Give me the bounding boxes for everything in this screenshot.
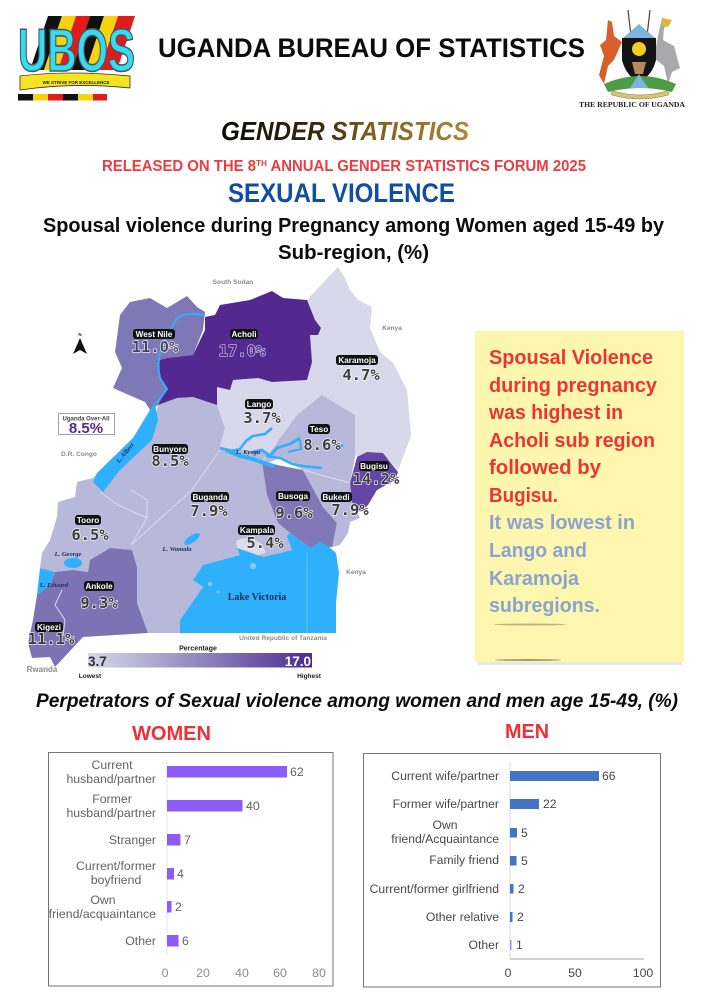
bar chart: men perpetrators: 22 xyxy=(543,797,557,811)
region label: Bukedi: 7.9% xyxy=(331,501,369,519)
bar chart: men perpetrators: friend/Acquaintance xyxy=(391,832,499,846)
callout: Uganda overall xyxy=(58,414,114,437)
region label: Buganda: Buganda xyxy=(192,493,228,502)
text: lowest finding: It was lowest in xyxy=(489,512,635,534)
map legend xyxy=(79,646,322,680)
bar chart: women perpetrators: Current/former xyxy=(76,859,156,873)
bar chart: men perpetrators: 66 xyxy=(602,769,616,783)
bar chart: men perpetrators: 50 xyxy=(568,966,582,980)
map legend: 3.7 xyxy=(88,654,107,669)
bar chart: women perpetrators: 2 xyxy=(175,900,182,914)
lake labels: L. Edward xyxy=(39,582,69,589)
bar chart: women perpetrators: 20 xyxy=(196,966,210,980)
bar chart: women perpetrators: friend/acquaintance xyxy=(49,907,156,921)
lake labels: Lake Victoria xyxy=(228,592,286,603)
neighbouring country labels: D.R. Congo xyxy=(61,451,97,458)
bar chart: women perpetrators: husband/partner xyxy=(66,772,156,786)
bar chart: men perpetrators: 1 xyxy=(516,938,523,952)
region label: Bugisu xyxy=(353,461,400,488)
region label: Buganda: 7.9% xyxy=(190,502,228,520)
bar chart: women perpetrators: 0 xyxy=(162,966,169,980)
lake: Albert and Nile xyxy=(93,314,205,492)
lake labels: L. Wamala xyxy=(161,546,192,553)
bar chart: women perpetrators: husband/partner xyxy=(66,806,156,820)
lake labels: L. Kyoga xyxy=(235,449,261,456)
heading: map title xyxy=(43,215,665,264)
region label: Busoga xyxy=(275,491,313,522)
region label: Acholi: 17.0% xyxy=(219,342,266,360)
lake labels: L. George xyxy=(54,551,81,558)
text: The Republic of Uganda: THE REPUBLIC OF UGANDA xyxy=(579,101,685,109)
bar chart: men perpetrators: Own xyxy=(432,818,458,832)
bar chart: men perpetrators: 2 xyxy=(518,882,525,896)
region label: Tooro xyxy=(71,515,109,544)
region label: Kampala xyxy=(238,525,284,552)
region: Acholi xyxy=(157,291,321,405)
logo: UBOS: WE STRIVE FOR EXCELLENCE xyxy=(42,80,110,85)
heading: map title: Sub-region, (%) xyxy=(278,242,429,264)
region borders xyxy=(55,442,350,636)
region label: Lango xyxy=(243,399,281,427)
region: Kampala xyxy=(236,538,266,558)
region: Karamoja and Lango xyxy=(217,267,411,470)
region label: Karamoja: 4.7% xyxy=(342,366,380,384)
text: lowest finding xyxy=(489,512,635,617)
lake: Edward xyxy=(37,568,55,595)
region label: Ankole xyxy=(80,581,118,612)
region label: Bukedi xyxy=(321,492,369,519)
heading: Men: MEN xyxy=(505,721,549,743)
region label: Teso: 8.6% xyxy=(303,436,341,454)
region label: West Nile: West Nile xyxy=(136,330,173,339)
heading: Women: WOMEN xyxy=(132,723,211,745)
region label: Kigezi: 11.1% xyxy=(28,630,75,648)
heading: perpetrators: Perpetrators of Sexual violence among women and men age 15-49, (%) xyxy=(36,691,678,712)
bar chart: women perpetrators: 40 xyxy=(246,799,260,813)
heading: Gender Statistics: GENDER STATISTICS xyxy=(221,118,469,146)
region label: Acholi: Acholi xyxy=(231,330,257,339)
region: Busoga xyxy=(262,462,337,548)
callout: Uganda overall: 8.5% xyxy=(69,420,103,437)
region: shore south of Lake Kyoga xyxy=(220,447,280,465)
region label: Teso: Teso xyxy=(310,425,328,434)
text: highest finding: Acholi sub region xyxy=(489,430,655,452)
bar chart: men perpetrators: Current/former girlfriend xyxy=(370,882,499,896)
bar chart: women perpetrators: Own xyxy=(90,893,116,907)
region label: Kampala: Kampala xyxy=(240,526,275,535)
text: lowest finding: Lango and xyxy=(489,540,587,562)
region label: Tooro: 6.5% xyxy=(71,526,109,544)
region label: Bugisu: 14.2% xyxy=(353,470,400,488)
neighbouring country labels: United Republic of Tanzania xyxy=(239,635,327,642)
lake: Wamala xyxy=(183,531,201,547)
icon: coat of arms of Uganda xyxy=(599,10,680,99)
text: release line: RELEASED ON THE 8 xyxy=(102,158,262,175)
map legend: 17.0 xyxy=(285,654,311,669)
region label: Bukedi: Bukedi xyxy=(322,493,350,502)
text: highest finding: Spousal Violence xyxy=(489,347,653,369)
logo: UBOS: UBOS xyxy=(18,17,135,84)
bar chart: women perpetrators: 7 xyxy=(184,833,191,847)
bar chart: men perpetrators: 5 xyxy=(521,826,528,840)
text: release line: TH xyxy=(256,158,267,168)
lake: Kyoga xyxy=(220,428,343,468)
text: lowest finding: subregions. xyxy=(489,595,600,617)
region label: Buganda xyxy=(190,492,229,520)
region label: Ankole: Ankole xyxy=(85,582,113,591)
text: release line: ANNUAL GENDER STATISTICS FORUM 2025 xyxy=(267,158,586,175)
region: West Nile xyxy=(113,296,205,410)
neighbouring country labels: Kenya xyxy=(346,569,366,576)
lake: Victoria xyxy=(180,533,339,633)
bar chart: women perpetrators: 60 xyxy=(273,966,287,980)
map legend: Percentage xyxy=(179,646,217,652)
bar chart: men perpetrators: 100 xyxy=(633,966,653,980)
bar chart: men perpetrators: Other relative xyxy=(426,910,499,924)
text: highest finding: was highest in xyxy=(488,402,623,424)
region label: Tooro: Tooro xyxy=(77,516,99,525)
bar chart: women perpetrators: Stranger xyxy=(109,833,156,847)
region label: Busoga: Busoga xyxy=(278,492,308,501)
bar chart: women perpetrators: 80 xyxy=(312,966,326,980)
bar chart: women perpetrators: Former xyxy=(92,792,132,806)
icon: north arrow xyxy=(73,332,87,354)
map legend: Lowest xyxy=(79,673,102,680)
bar chart: men perpetrators: Former wife/partner xyxy=(393,797,499,811)
bar chart: men perpetrators: 0 xyxy=(505,966,512,980)
bar chart: women perpetrators: 6 xyxy=(182,934,189,948)
text: lowest finding: Karamoja xyxy=(489,568,580,590)
heading: Uganda Bureau of Statistics: UGANDA BUREAU OF STATISTICS xyxy=(158,33,585,63)
bar chart: men perpetrators: 5 xyxy=(521,854,528,868)
region label: Bugisu: Bugisu xyxy=(360,462,388,471)
text: highest finding xyxy=(488,347,658,507)
region label: Teso xyxy=(303,424,341,454)
region: Teso xyxy=(270,395,355,483)
region label: Kigezi xyxy=(28,622,75,648)
lake: George xyxy=(64,558,82,568)
region label: Lango: Lango xyxy=(247,400,271,409)
region label: Kigezi: Kigezi xyxy=(37,623,61,632)
region label: Acholi xyxy=(219,329,266,360)
lake labels xyxy=(39,442,286,603)
region label: West Nile: 11.0% xyxy=(132,338,179,356)
text: highest finding: Bugisu. xyxy=(489,485,558,507)
region label: Lango: 3.7% xyxy=(243,409,281,427)
heading: map title: Spousal violence during Pregnancy among Women aged 15-49 by xyxy=(43,215,665,237)
bar chart: men perpetrators: Current wife/partner xyxy=(391,769,499,783)
region: Bugisu xyxy=(350,452,398,512)
callout: Uganda overall: Uganda Over-All xyxy=(62,416,110,422)
bar chart: women perpetrators xyxy=(48,752,333,986)
region label: Ankole: 9.3% xyxy=(80,594,118,612)
logo: UBOS xyxy=(18,16,135,100)
panel: yellow key-finding note xyxy=(475,331,684,665)
neighbouring country labels: Kenya xyxy=(382,325,402,332)
region label: Bunyoro: Bunyoro xyxy=(153,445,187,454)
heading: Sexual Violence: SEXUAL VIOLENCE xyxy=(228,178,455,208)
region: southern base (Bunyoro, Buganda, Tooro) xyxy=(40,397,292,633)
region: Ankole and Kigezi xyxy=(28,548,148,667)
choropleth map of Uganda sub-regions xyxy=(27,267,411,674)
icon: north arrow: N xyxy=(78,332,82,337)
bar chart: women perpetrators: boyfriend xyxy=(91,873,141,887)
bar chart: men perpetrators: Other xyxy=(469,938,499,952)
bar chart: women perpetrators: 4 xyxy=(177,867,184,881)
bar chart: women perpetrators: Current xyxy=(91,758,133,772)
region label: Bunyoro xyxy=(151,444,189,470)
bar chart: women perpetrators: 40 xyxy=(235,966,249,980)
bar chart: men perpetrators xyxy=(364,754,660,987)
region label: Karamoja: Karamoja xyxy=(338,356,376,365)
region: Bukedi xyxy=(303,470,360,547)
text: highest finding: during pregnancy xyxy=(489,375,658,397)
region label: Busoga: 9.6% xyxy=(275,504,313,522)
lake labels: L. Albert xyxy=(114,442,136,465)
neighbouring country labels: South Sudan xyxy=(213,279,253,286)
map legend: Highest xyxy=(297,673,322,680)
bar chart: women perpetrators: 62 xyxy=(290,765,304,779)
text: highest finding: followed by xyxy=(489,457,602,479)
bar chart: women perpetrators: Other xyxy=(125,934,156,948)
region label: Kampala: 5.4% xyxy=(246,534,284,552)
region label: Bunyoro: 8.5% xyxy=(151,452,189,470)
region label: West Nile xyxy=(132,329,179,356)
bar chart: men perpetrators: Family friend xyxy=(429,853,499,867)
region label: Karamoja xyxy=(336,355,380,384)
bar chart: men perpetrators: 2 xyxy=(517,910,524,924)
neighbouring country labels: Rwanda xyxy=(27,665,58,674)
neighbouring country labels xyxy=(27,279,402,674)
